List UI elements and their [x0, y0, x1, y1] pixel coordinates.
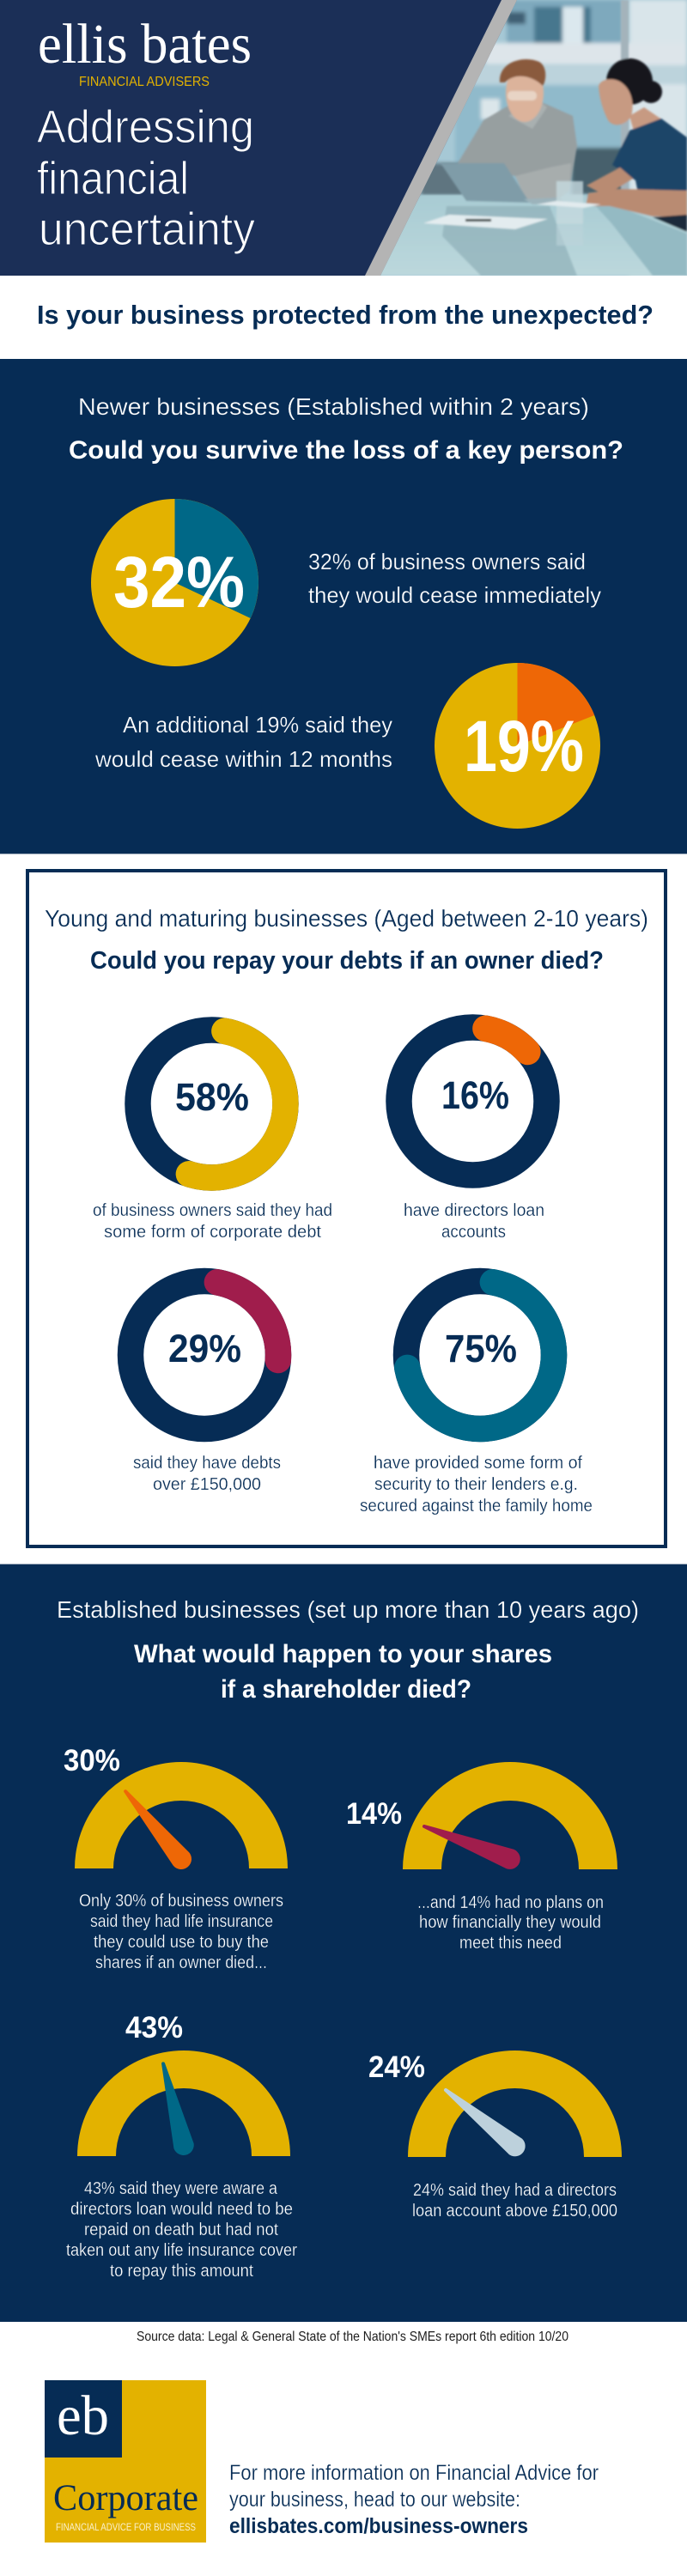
caption: 58% — [93, 1201, 332, 1242]
caption: 43%: directors loan would need to be — [70, 2200, 293, 2219]
caption: 30%: shares if an owner died... — [95, 1953, 267, 1972]
donut: 16%: 16% — [441, 1073, 509, 1117]
logo: eb Corporate: eb — [57, 2385, 109, 2447]
gauge: 30% — [64, 1744, 288, 1869]
section question: Could you repay your debts if an owner died? — [90, 947, 604, 975]
call to action: For more information on Financial Advice for — [229, 2461, 599, 2485]
donut: 58% — [137, 1030, 285, 1178]
donut: 75% — [406, 1281, 554, 1429]
caption: 43%: taken out any life insurance cover — [66, 2241, 297, 2260]
donut: 75%: 75% — [445, 1327, 517, 1370]
caption: 16% — [404, 1201, 544, 1242]
caption: 30%: said they had life insurance — [90, 1912, 273, 1931]
caption: 43%: repaid on death but had not — [84, 2221, 278, 2239]
caption: 14% — [417, 1893, 604, 1953]
gauge: 30%: 30% — [64, 1744, 120, 1777]
pie chart: 19%: 19% — [464, 706, 584, 787]
gauge: 24% — [368, 2050, 622, 2157]
pie chart: 32%: 32% — [113, 542, 245, 623]
donut: 58%: 58% — [175, 1075, 249, 1119]
caption: 14%: how financially they would — [419, 1913, 601, 1932]
text: additional 19%: An additional 19% said they — [123, 712, 392, 738]
caption: 14%: ...and 14% had no plans on — [417, 1893, 604, 1912]
logo: eb Corporate: FINANCIAL ADVICE FOR BUSINESS — [56, 2521, 196, 2533]
donut: 16% — [398, 1027, 546, 1175]
caption: 43%: 43% said they were aware a — [84, 2179, 278, 2198]
caption: 16%: have directors loan — [404, 1201, 544, 1220]
section question: if a shareholder died? — [221, 1675, 471, 1704]
caption: 75%: secured against the family home — [360, 1497, 593, 1516]
panel: newer businesses — [0, 359, 687, 854]
subtitle: Is your business protected from the unexpected? — [37, 300, 654, 330]
section heading: Established businesses (set up more than 10 years ago) — [57, 1596, 639, 1623]
caption: 30% — [79, 1892, 283, 1972]
logo: eb Corporate: Corporate — [53, 2478, 198, 2518]
call to action: your business, head to our website: — [229, 2488, 520, 2512]
gauge: 14%: 14% — [346, 1797, 402, 1831]
caption: 29%: said they have debts — [133, 1454, 281, 1473]
caption: 14%: meet this need — [459, 1934, 562, 1953]
logo: ellis bates: FINANCIAL ADVISERS — [79, 75, 210, 89]
logo: ellis bates: ellis bates — [38, 13, 252, 76]
donut: 29%: 29% — [168, 1327, 241, 1370]
caption: 30%: they could use to buy the — [94, 1933, 269, 1952]
woman — [606, 58, 653, 105]
section heading: Newer businesses (Established within 2 years) — [78, 393, 589, 420]
table reflection of laptop — [442, 206, 577, 276]
caption: 16%: accounts — [441, 1223, 506, 1242]
grey diagonal band — [365, 0, 517, 276]
title: uncertainty — [39, 204, 255, 255]
gauge: 14% — [346, 1762, 617, 1869]
photo: two colleagues at a laptop — [361, 0, 687, 276]
text: 32% cease immediately — [308, 549, 601, 608]
section question — [134, 1640, 552, 1704]
logo: eb Corporate — [45, 2380, 206, 2543]
panel: young and maturing businesses — [27, 871, 666, 1546]
man sweater — [459, 103, 577, 181]
glass — [556, 181, 583, 224]
caption: 75%: security to their lenders e.g. — [374, 1475, 578, 1494]
caption: 43%: to repay this amount — [110, 2262, 253, 2281]
donut: 29% — [131, 1281, 278, 1429]
pie chart: 32% — [91, 499, 258, 666]
caption: 75% — [360, 1454, 593, 1516]
gauge: 24%: 24% — [368, 2050, 425, 2084]
title: Addressing — [37, 101, 254, 153]
panel: established businesses — [0, 1564, 687, 2322]
pie chart: 19% — [435, 663, 600, 829]
section question: Could you survive the loss of a key person? — [69, 436, 623, 465]
caption: 24% — [412, 2181, 617, 2221]
source note: Source data: Legal & General State of the Nation's SMEs report 6th edition 10/20 — [137, 2330, 568, 2344]
text: 32% cease immediately: they would cease immediately — [308, 582, 601, 608]
title — [37, 101, 255, 255]
caption: 29%: over £150,000 — [153, 1475, 261, 1494]
papers — [423, 215, 548, 229]
caption: 29% — [133, 1454, 281, 1494]
caption: 24%: loan account above £150,000 — [412, 2202, 617, 2221]
call to action — [229, 2461, 599, 2538]
section question: What would happen to your shares — [134, 1640, 552, 1668]
text: additional 19% — [94, 712, 392, 772]
laptop — [441, 163, 530, 203]
man head — [505, 76, 544, 123]
caption: 75%: have provided some form of — [374, 1454, 582, 1473]
text: additional 19%: would cease within 12 months — [94, 746, 392, 772]
section heading: Young and maturing businesses (Aged between 2-10 years) — [45, 905, 648, 932]
caption: 58%: of business owners said they had — [93, 1201, 332, 1220]
call to action: ellisbates.com/business-owners — [229, 2514, 528, 2538]
gauge: 43% — [77, 2011, 290, 2156]
caption: 30%: Only 30% of business owners — [79, 1892, 283, 1911]
caption: 43% — [66, 2179, 297, 2281]
header panel — [0, 0, 687, 276]
caption: 58%: some form of corporate debt — [104, 1223, 321, 1242]
gauge: 43%: 43% — [125, 2011, 183, 2044]
text: 32% cease immediately: 32% of business owners said — [308, 549, 586, 574]
caption: 24%: 24% said they had a directors — [413, 2181, 617, 2200]
title: financial — [37, 153, 189, 204]
